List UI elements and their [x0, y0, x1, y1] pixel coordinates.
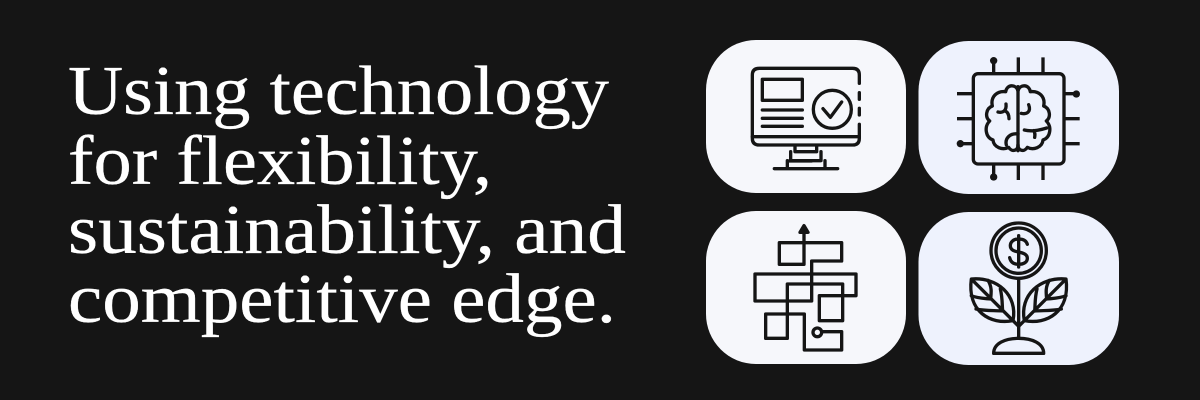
icon: monitor with checkmark: [752, 68, 859, 169]
title: competitive edge.: [68, 261, 616, 338]
icon: flowchart path with arrow: [755, 226, 856, 350]
icon: brain on a chip: [957, 57, 1080, 181]
icon: plant growing a dollar coin: [971, 223, 1067, 353]
panel: monitor card: [706, 40, 906, 193]
title: Using technology: [68, 53, 609, 130]
panel: AI chip card: [918, 41, 1119, 194]
title: for flexibility,: [68, 123, 492, 200]
panel: flowchart card: [706, 211, 906, 364]
title: sustainability, and: [68, 192, 626, 269]
panel: money plant card: [918, 212, 1119, 365]
title: [68, 53, 626, 338]
